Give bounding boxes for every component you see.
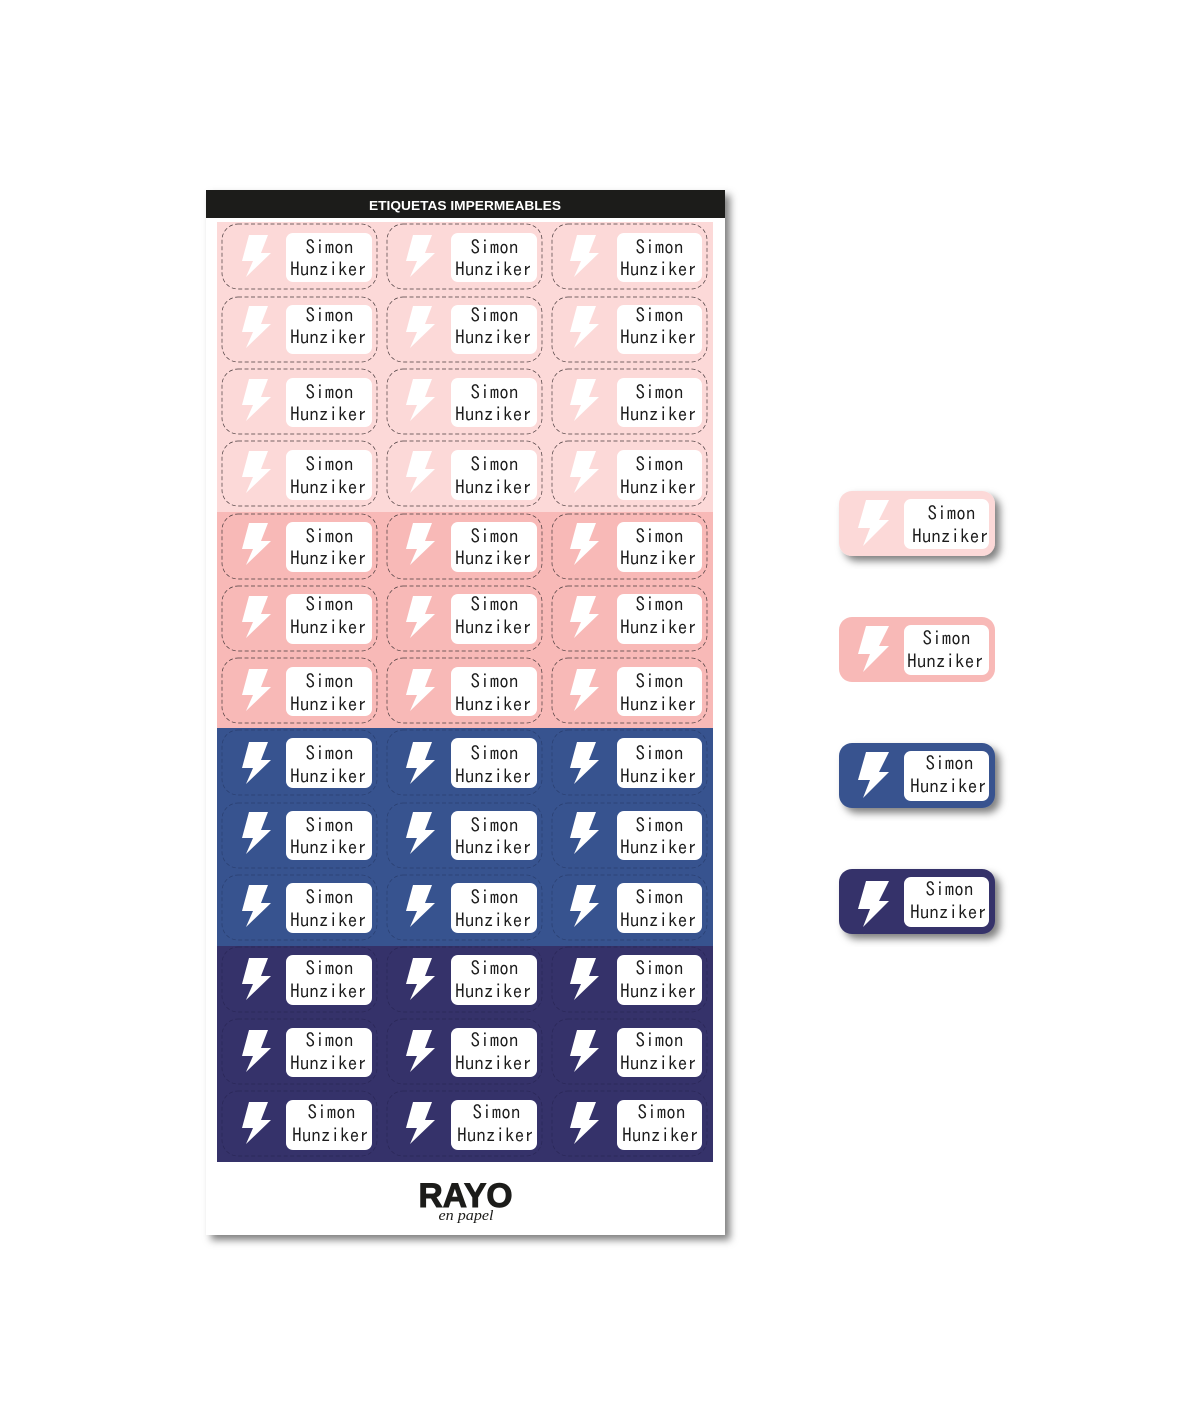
sticker row 11 col 2: Simon <box>470 959 518 978</box>
sticker row 13 col 3: Simon <box>638 1103 686 1122</box>
sticker row 4 col 2: Simon <box>470 455 518 474</box>
sticker row 12 col 2: Hunziker <box>455 1054 532 1073</box>
sticker row 13 col 3 <box>552 1091 707 1156</box>
sticker row 5 col 2: Simon <box>470 527 518 546</box>
sticker row 10 col 1: Hunziker <box>290 911 367 930</box>
sticker row 3 col 2: Hunziker <box>455 405 532 424</box>
sticker row 9 col 3 <box>552 803 707 868</box>
sticker row 12 col 1: Hunziker <box>290 1054 367 1073</box>
sample label: salmon pink: Simon <box>922 629 970 648</box>
sticker row 5 col 3 <box>552 514 707 579</box>
sticker row 4 col 1 <box>222 441 377 506</box>
sticker row 10 col 2: Hunziker <box>455 911 532 930</box>
sticker row 1 col 3: Hunziker <box>620 260 697 279</box>
sticker row 2 col 1: Simon <box>306 306 354 325</box>
sticker row 1 col 2 <box>387 224 542 289</box>
logo: RAYO en papel: RAYO <box>418 1177 512 1215</box>
sticker row 3 col 2 <box>387 369 542 434</box>
sticker row 9 col 3: Hunziker <box>620 838 697 857</box>
sticker row 8 col 2: Hunziker <box>455 767 532 786</box>
sticker row 4 col 3 <box>552 441 707 506</box>
sticker row 8 col 3: Hunziker <box>620 767 697 786</box>
sticker row 3 col 3 <box>552 369 707 434</box>
sticker row 10 col 3 <box>552 875 707 940</box>
sticker row 6 col 3 <box>552 586 707 651</box>
sticker row 13 col 1: Hunziker <box>292 1126 369 1145</box>
sample label: light pink <box>839 491 995 556</box>
colour band: navy <box>217 946 713 1162</box>
sample label: salmon pink <box>839 617 995 682</box>
sticker row 4 col 1: Simon <box>306 455 354 474</box>
sticker row 1 col 3 <box>552 224 707 289</box>
sticker row 3 col 1: Hunziker <box>290 405 367 424</box>
sticker row 6 col 1: Simon <box>306 595 354 614</box>
sticker row 9 col 1: Simon <box>306 816 354 835</box>
sticker row 5 col 3: Hunziker <box>620 549 697 568</box>
sticker row 7 col 3 <box>552 658 707 723</box>
sticker row 4 col 2: Hunziker <box>455 478 532 497</box>
sticker row 8 col 2 <box>387 730 542 795</box>
sticker row 7 col 3: Hunziker <box>620 695 697 714</box>
sticker row 9 col 1 <box>222 803 377 868</box>
sticker row 2 col 2 <box>387 297 542 362</box>
sticker row 5 col 1: Hunziker <box>290 549 367 568</box>
sticker row 2 col 2: Hunziker <box>455 328 532 347</box>
header bar <box>206 190 725 218</box>
sticker row 9 col 2: Hunziker <box>455 838 532 857</box>
sticker row 9 col 3: Simon <box>636 816 684 835</box>
sticker row 7 col 2: Simon <box>470 672 518 691</box>
sticker row 11 col 3: Hunziker <box>620 982 697 1001</box>
heading: ETIQUETAS IMPERMEABLES <box>369 198 561 213</box>
sample label: blue <box>839 743 995 808</box>
sticker row 6 col 1: Hunziker <box>290 618 367 637</box>
sticker row 2 col 2: Simon <box>470 306 518 325</box>
sample label: light pink: Hunziker <box>912 527 989 546</box>
sticker row 7 col 2: Hunziker <box>455 695 532 714</box>
sticker row 13 col 2: Hunziker <box>457 1126 534 1145</box>
sticker row 4 col 1: Hunziker <box>290 478 367 497</box>
sample label: salmon pink: Hunziker <box>907 652 984 671</box>
sticker row 13 col 1: Simon <box>308 1103 356 1122</box>
sticker row 10 col 1 <box>222 875 377 940</box>
sticker row 6 col 2: Simon <box>470 595 518 614</box>
sample label: navy <box>839 869 995 934</box>
sticker row 7 col 2 <box>387 658 542 723</box>
sticker row 1 col 2: Hunziker <box>455 260 532 279</box>
sticker row 10 col 2: Simon <box>470 888 518 907</box>
sticker row 5 col 3: Simon <box>636 527 684 546</box>
sticker row 6 col 2 <box>387 586 542 651</box>
sticker row 12 col 3: Simon <box>636 1031 684 1050</box>
sticker row 7 col 1: Hunziker <box>290 695 367 714</box>
sticker row 2 col 3 <box>552 297 707 362</box>
sticker row 11 col 2: Hunziker <box>455 982 532 1001</box>
sticker row 10 col 3: Simon <box>636 888 684 907</box>
sticker row 5 col 1: Simon <box>306 527 354 546</box>
sticker row 12 col 1: Simon <box>306 1031 354 1050</box>
sticker row 3 col 3: Hunziker <box>620 405 697 424</box>
sticker row 3 col 2: Simon <box>470 383 518 402</box>
sticker row 11 col 3 <box>552 947 707 1012</box>
sticker row 1 col 1: Simon <box>306 238 354 257</box>
sticker row 9 col 2 <box>387 803 542 868</box>
sticker row 4 col 3: Hunziker <box>620 478 697 497</box>
sticker row 2 col 1 <box>222 297 377 362</box>
panel: label sheet <box>206 190 725 1235</box>
sticker row 12 col 3: Hunziker <box>620 1054 697 1073</box>
sticker row 7 col 3: Simon <box>636 672 684 691</box>
sticker row 3 col 1: Simon <box>306 383 354 402</box>
colour band: blue <box>217 728 713 946</box>
colour band: light pink <box>217 222 713 512</box>
sticker row 13 col 2: Simon <box>472 1103 520 1122</box>
sticker row 10 col 3: Hunziker <box>620 911 697 930</box>
sticker row 9 col 2: Simon <box>470 816 518 835</box>
sample label: blue: Hunziker <box>910 777 987 796</box>
sticker row 8 col 1 <box>222 730 377 795</box>
sticker row 6 col 2: Hunziker <box>455 618 532 637</box>
sticker row 8 col 1: Hunziker <box>290 767 367 786</box>
sticker row 5 col 1 <box>222 514 377 579</box>
sticker row 1 col 2: Simon <box>470 238 518 257</box>
sticker row 10 col 1: Simon <box>306 888 354 907</box>
sticker row 12 col 2 <box>387 1019 542 1084</box>
sticker row 7 col 1: Simon <box>306 672 354 691</box>
sample label: navy: Hunziker <box>910 903 987 922</box>
sticker row 2 col 1: Hunziker <box>290 328 367 347</box>
sticker row 1 col 1: Hunziker <box>290 260 367 279</box>
sticker row 4 col 3: Simon <box>636 455 684 474</box>
sticker row 4 col 2 <box>387 441 542 506</box>
sticker row 12 col 2: Simon <box>470 1031 518 1050</box>
sticker row 8 col 2: Simon <box>470 744 518 763</box>
sticker row 11 col 2 <box>387 947 542 1012</box>
sticker row 11 col 1 <box>222 947 377 1012</box>
sticker row 12 col 1 <box>222 1019 377 1084</box>
sticker row 11 col 1: Simon <box>306 959 354 978</box>
sticker row 13 col 3: Hunziker <box>622 1126 699 1145</box>
sticker row 10 col 2 <box>387 875 542 940</box>
sticker row 8 col 3 <box>552 730 707 795</box>
colour band: salmon pink <box>217 512 713 728</box>
sticker row 8 col 1: Simon <box>306 744 354 763</box>
sticker row 11 col 3: Simon <box>636 959 684 978</box>
sheet background <box>206 190 725 1235</box>
sticker row 5 col 2: Hunziker <box>455 549 532 568</box>
sticker row 13 col 1 <box>222 1091 377 1156</box>
sticker row 5 col 2 <box>387 514 542 579</box>
sticker row 7 col 1 <box>222 658 377 723</box>
sticker row 11 col 1: Hunziker <box>290 982 367 1001</box>
sticker row 9 col 1: Hunziker <box>290 838 367 857</box>
sticker row 3 col 1 <box>222 369 377 434</box>
sticker row 6 col 3: Simon <box>636 595 684 614</box>
sticker row 6 col 3: Hunziker <box>620 618 697 637</box>
sticker row 8 col 3: Simon <box>636 744 684 763</box>
sample label: navy: Simon <box>926 880 974 899</box>
logo: RAYO en papel: en papel <box>438 1208 494 1224</box>
sticker row 12 col 3 <box>552 1019 707 1084</box>
sample label: blue: Simon <box>926 754 974 773</box>
sticker row 13 col 2 <box>387 1091 542 1156</box>
sticker row 2 col 3: Simon <box>636 306 684 325</box>
sticker row 6 col 1 <box>222 586 377 651</box>
sticker row 2 col 3: Hunziker <box>620 328 697 347</box>
sticker row 1 col 1 <box>222 224 377 289</box>
sticker row 3 col 3: Simon <box>636 383 684 402</box>
sticker row 1 col 3: Simon <box>636 238 684 257</box>
sample label: light pink: Simon <box>928 504 976 523</box>
